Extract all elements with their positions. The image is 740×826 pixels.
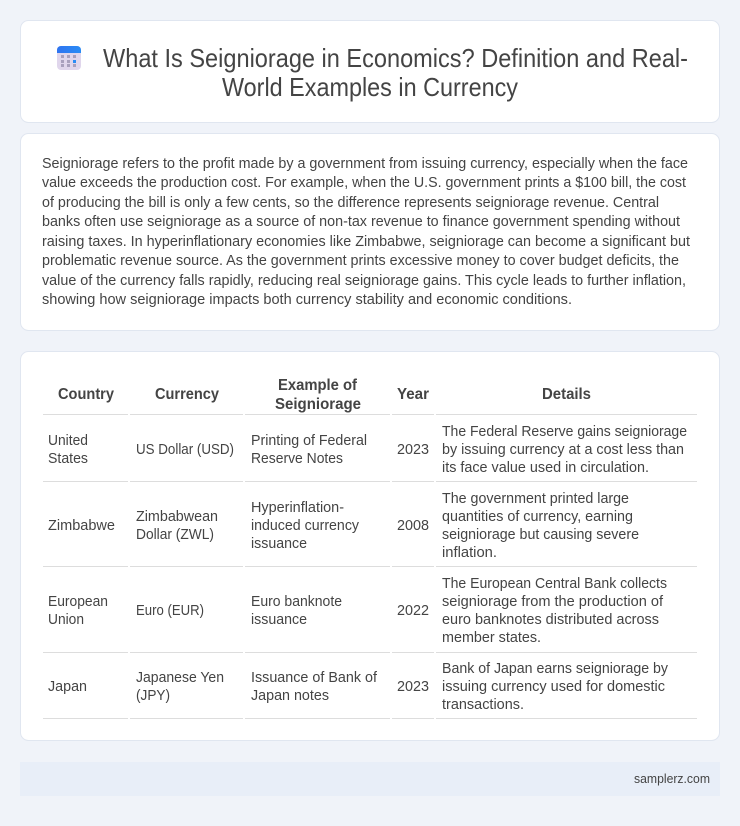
table row: European Union: euro banknotes distributed across <box>442 612 659 628</box>
table row: Zimbabwe: issuance <box>251 536 307 552</box>
table row: European Union: Euro (EUR) <box>136 603 204 619</box>
table row: European Union: seigniorage from the production of <box>442 594 664 610</box>
text block: definition paragraph: Seigniorage refers to the profit made by a government from issuing currency, especially when the face <box>42 156 688 172</box>
text block: definition paragraph: problematic revenue source. As the government prints excessive money to cover budget deficits, the <box>42 253 679 269</box>
table row: European Union: European <box>48 594 108 610</box>
icon: calendar <box>57 46 81 70</box>
table row: European Union: Union <box>48 612 84 628</box>
table row: United States <box>48 424 687 476</box>
footer text: samplerz.com <box>634 771 710 786</box>
text block: definition paragraph: value exceeds the production cost. For example, when the U.S. government prints a $100 bill, the cost <box>42 175 686 191</box>
panel: title header <box>20 20 720 122</box>
table row: Japan: Bank of Japan earns seigniorage by <box>442 661 669 677</box>
text block: definition paragraph: raising taxes. In hyperinflationary economies like Zimbabwe, seigniorage can become a significant but <box>42 234 690 250</box>
text block: definition paragraph <box>42 156 690 308</box>
table row: Japan: transactions. <box>442 697 524 713</box>
heading <box>103 45 688 102</box>
table row: Japan: Issuance of Bank of <box>251 670 378 686</box>
panel: seigniorage table <box>20 352 720 740</box>
table header row: Example of <box>278 377 358 394</box>
table row: Zimbabwe: The government printed large <box>442 491 629 507</box>
table header row: Country <box>58 386 114 403</box>
table row: Japan: Japan notes <box>251 688 329 704</box>
table row: United States: its face value used in circulation. <box>442 460 649 476</box>
table row: Japan: issuing currency used for domestic <box>442 679 665 695</box>
table header row <box>58 377 591 413</box>
footer bar <box>20 762 720 796</box>
table row: Japan <box>48 661 669 713</box>
table row: Japan: (JPY) <box>136 688 170 704</box>
text block: definition paragraph: banks often use seigniorage as a source of non-tax revenue to finance government spending without <box>42 214 680 230</box>
table row: United States: Printing of Federal <box>251 433 367 449</box>
table row: Japan: Japanese Yen <box>136 670 224 686</box>
table row: Zimbabwe: Zimbabwe <box>48 518 115 534</box>
table row: United States: United <box>48 433 88 449</box>
table row: Zimbabwe: Dollar (ZWL) <box>136 527 214 543</box>
text block: definition paragraph: of producing the bill is only a few cents, so the difference represents seigniorage revenue. Central <box>42 195 659 211</box>
table row: Japan: 2023 <box>397 679 429 695</box>
table header row: Seigniorage <box>275 396 361 413</box>
table row: Zimbabwe: 2008 <box>397 518 429 534</box>
table row: European Union: issuance <box>251 612 307 628</box>
text block: definition paragraph: showing how seigniorage impacts both currency stability and economic conditions. <box>42 292 572 308</box>
table row: European Union: Euro banknote <box>251 594 342 610</box>
text block: definition paragraph: value of the currency falls rapidly, reducing real seigniorage gains. This cycle leads to further inflation, <box>42 273 686 289</box>
panel: definition text <box>20 134 720 330</box>
table row: European Union <box>48 576 667 646</box>
table row: Zimbabwe: seigniorage but causing severe <box>442 527 639 543</box>
table row: Zimbabwe <box>48 491 639 561</box>
table header row: Currency <box>155 386 219 403</box>
table row: United States: 2023 <box>397 442 429 458</box>
table row: Zimbabwe: induced currency <box>251 518 360 534</box>
table row: United States: The Federal Reserve gains seigniorage <box>442 424 687 440</box>
heading: What Is Seigniorage in Economics? Definition and Real- <box>103 45 688 73</box>
table row: European Union: The European Central Bank collects <box>442 576 667 592</box>
table row: Zimbabwe: quantities of currency, earning <box>442 509 633 525</box>
table row: United States: States <box>48 451 88 467</box>
table header row: Year <box>397 386 429 403</box>
table row: Japan: Japan <box>48 679 87 695</box>
heading: World Examples in Currency <box>222 74 518 102</box>
table row: Zimbabwe: inflation. <box>442 545 497 561</box>
table row: European Union: 2022 <box>397 603 429 619</box>
table row: United States: by issuing currency at a cost less than <box>442 442 684 458</box>
table header row: Details <box>542 386 591 403</box>
table row: United States: US Dollar (USD) <box>136 442 234 458</box>
table row: United States: Reserve Notes <box>251 451 343 467</box>
table row: Zimbabwe: Hyperinflation- <box>251 500 344 516</box>
table row: Zimbabwe: Zimbabwean <box>136 509 218 525</box>
table row: European Union: member states. <box>442 630 541 646</box>
